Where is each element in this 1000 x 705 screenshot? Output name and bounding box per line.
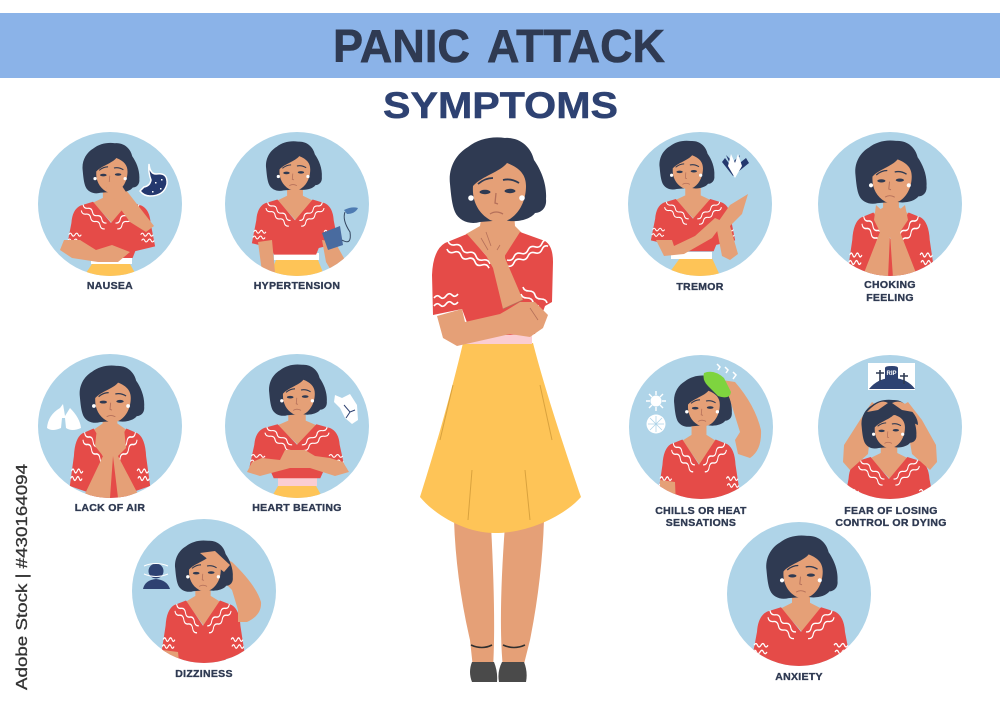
blouse (432, 232, 553, 336)
belt (462, 334, 532, 344)
skirt (420, 343, 581, 533)
panel: heart beating (225, 354, 369, 514)
heat waves (717, 364, 736, 379)
icon: dizzy person (143, 564, 170, 589)
label: LACK OF AIR (75, 502, 145, 514)
panel: dizziness (132, 519, 276, 680)
label: FEAR OF LOSING (844, 505, 938, 517)
icon: snowflake (646, 414, 666, 434)
icon: stomach (140, 164, 167, 196)
shoes (470, 662, 527, 682)
title band (0, 13, 1000, 78)
panel: tremor (628, 132, 772, 293)
icon: lungs (47, 404, 81, 430)
panel: lack of air (38, 354, 182, 514)
legs (454, 520, 544, 668)
label: ANXIETY (775, 671, 823, 683)
icon: sun (646, 391, 666, 411)
icon: grave (868, 363, 915, 390)
neck (466, 212, 522, 268)
panel: chills or heat sensations (629, 355, 773, 529)
label: FEELING (866, 292, 914, 304)
label: CHILLS OR HEAT (655, 505, 747, 517)
label: DIZZINESS (175, 668, 233, 680)
label: HYPERTENSION (254, 280, 340, 292)
green ice pack (704, 372, 731, 397)
label: HEART BEATING (252, 502, 342, 514)
panel: central woman (420, 137, 581, 682)
raised arm and hand (479, 228, 523, 309)
label: CHOKING (864, 279, 916, 291)
subtitle: SYMPTOMS (383, 85, 618, 126)
label: SENSATIONS (666, 517, 736, 529)
title: PANIC (333, 20, 470, 72)
crossed arm (437, 302, 548, 346)
icon: shaking hand (722, 154, 749, 178)
panel: fear of losing control or dying (818, 355, 962, 529)
icon: heart (334, 394, 358, 424)
panel: anxiety (727, 522, 871, 683)
stock credit: Adobe Stock | #430164094 (14, 464, 31, 690)
label: TREMOR (676, 281, 724, 293)
panel: choking feeling (818, 132, 962, 304)
panel: nausea (38, 132, 182, 292)
label: CONTROL OR DYING (835, 517, 947, 529)
head (450, 137, 546, 223)
icon: grave: RIP (886, 371, 897, 377)
label: NAUSEA (87, 280, 133, 292)
panel: hypertension (225, 132, 369, 292)
blood pressure cuff (322, 226, 343, 250)
title: ATTACK (487, 20, 665, 72)
